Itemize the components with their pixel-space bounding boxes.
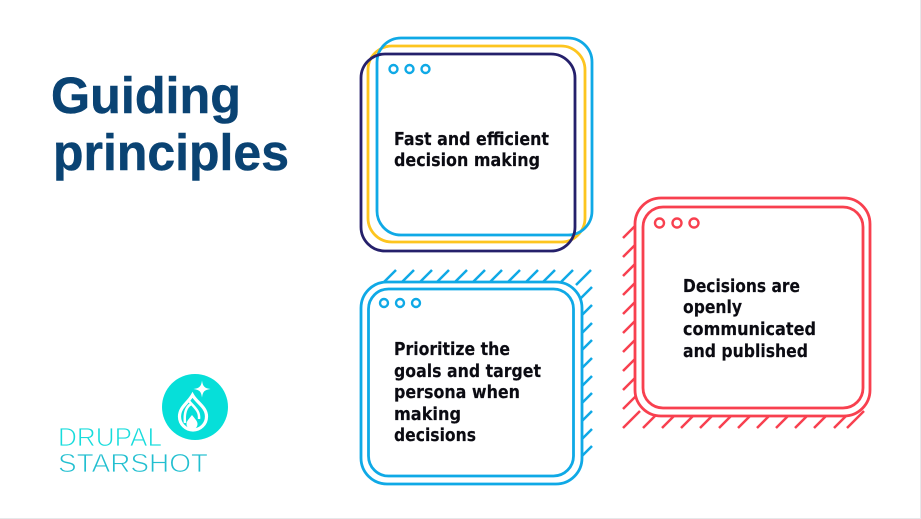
text: fast and efficient decision making: decision making	[394, 151, 540, 171]
text: decisions are openly communicated: openly	[683, 298, 743, 318]
text: prioritize the goals: persona when	[394, 383, 520, 403]
text: fast and efficient decision making	[394, 130, 549, 171]
hatching: left and bottom	[623, 221, 864, 428]
text: decisions are openly communicated	[683, 277, 816, 362]
text: prioritize the goals	[394, 340, 541, 446]
text: prioritize the goals: decisions	[394, 426, 476, 446]
panel: decisions are openly communicated	[623, 198, 870, 428]
logo: Drupal Starshot: STARSHOT	[58, 448, 208, 478]
icon: window dots	[380, 299, 420, 307]
text: decisions are openly communicated: Decisions are	[683, 277, 800, 297]
title: Guiding	[51, 67, 241, 124]
panel: fast and efficient decision making	[361, 38, 592, 251]
logo: Drupal Starshot	[58, 374, 228, 478]
text: decisions are openly communicated: and published	[683, 342, 808, 362]
icon: window dots	[655, 218, 698, 228]
panel: prioritize the goals and target persona	[361, 270, 592, 484]
text: prioritize the goals: Prioritize the	[394, 340, 510, 360]
text: decisions are openly communicated: communicated	[683, 320, 816, 340]
logo: Drupal Starshot: DRUPAL	[58, 422, 162, 452]
title: principles	[53, 124, 289, 181]
icon: window dots	[390, 65, 430, 73]
text: fast and efficient decision making: Fast and efficient	[394, 130, 549, 150]
icon: teal circle with drop and star	[162, 374, 228, 440]
title	[51, 67, 289, 181]
text: prioritize the goals: goals and target	[394, 362, 541, 382]
hatching: top and right	[381, 270, 592, 461]
text: prioritize the goals: making	[394, 405, 461, 425]
